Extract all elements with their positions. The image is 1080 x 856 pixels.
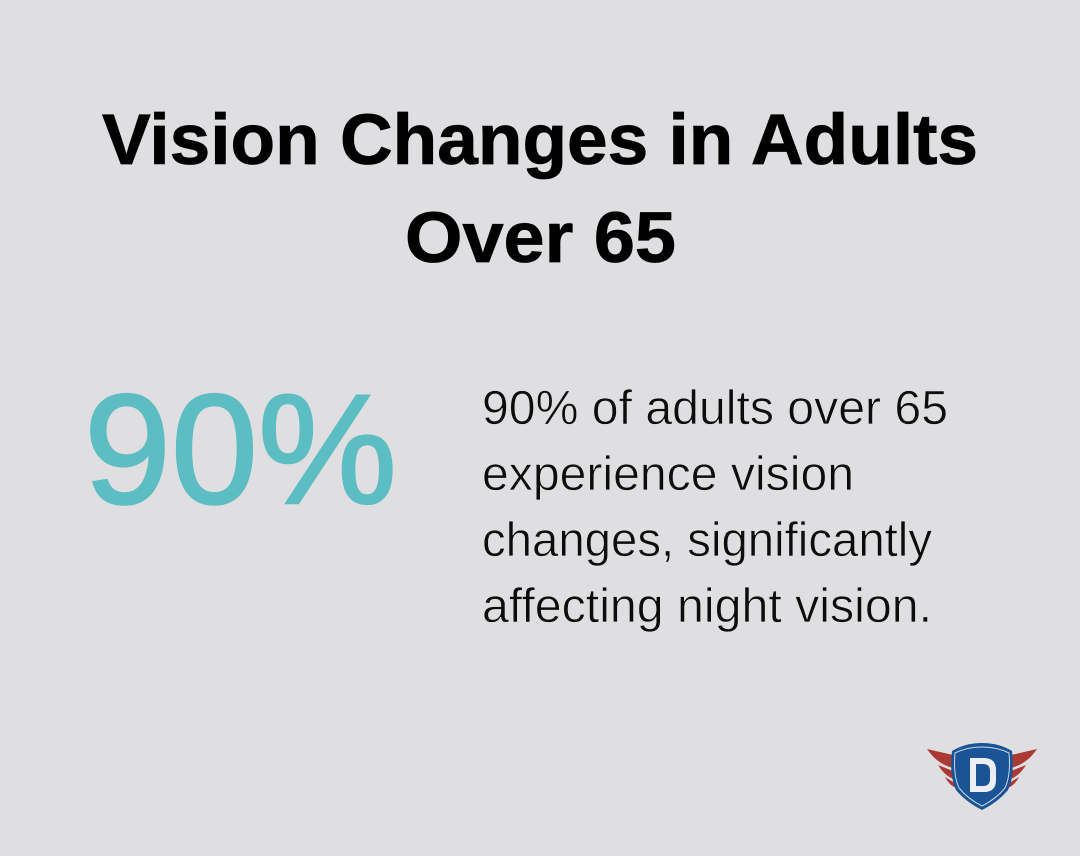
- description text: changes, significantly: [482, 514, 932, 567]
- description text: affecting night vision.: [482, 580, 932, 633]
- description text: experience vision: [482, 448, 854, 501]
- icon: shield logo with wings: [927, 743, 1037, 810]
- title: [102, 101, 978, 278]
- icon: left wing: [927, 749, 956, 788]
- big statistic: 90%: 90%: [84, 363, 397, 537]
- icon: shield: [951, 743, 1013, 810]
- description text: [482, 382, 948, 633]
- icon: letter D: [970, 758, 996, 792]
- icon: right wing: [1008, 749, 1037, 788]
- description text: 90% of adults over 65: [482, 382, 948, 435]
- title: Vision Changes in Adults: [102, 101, 978, 180]
- title: Over 65: [405, 199, 676, 278]
